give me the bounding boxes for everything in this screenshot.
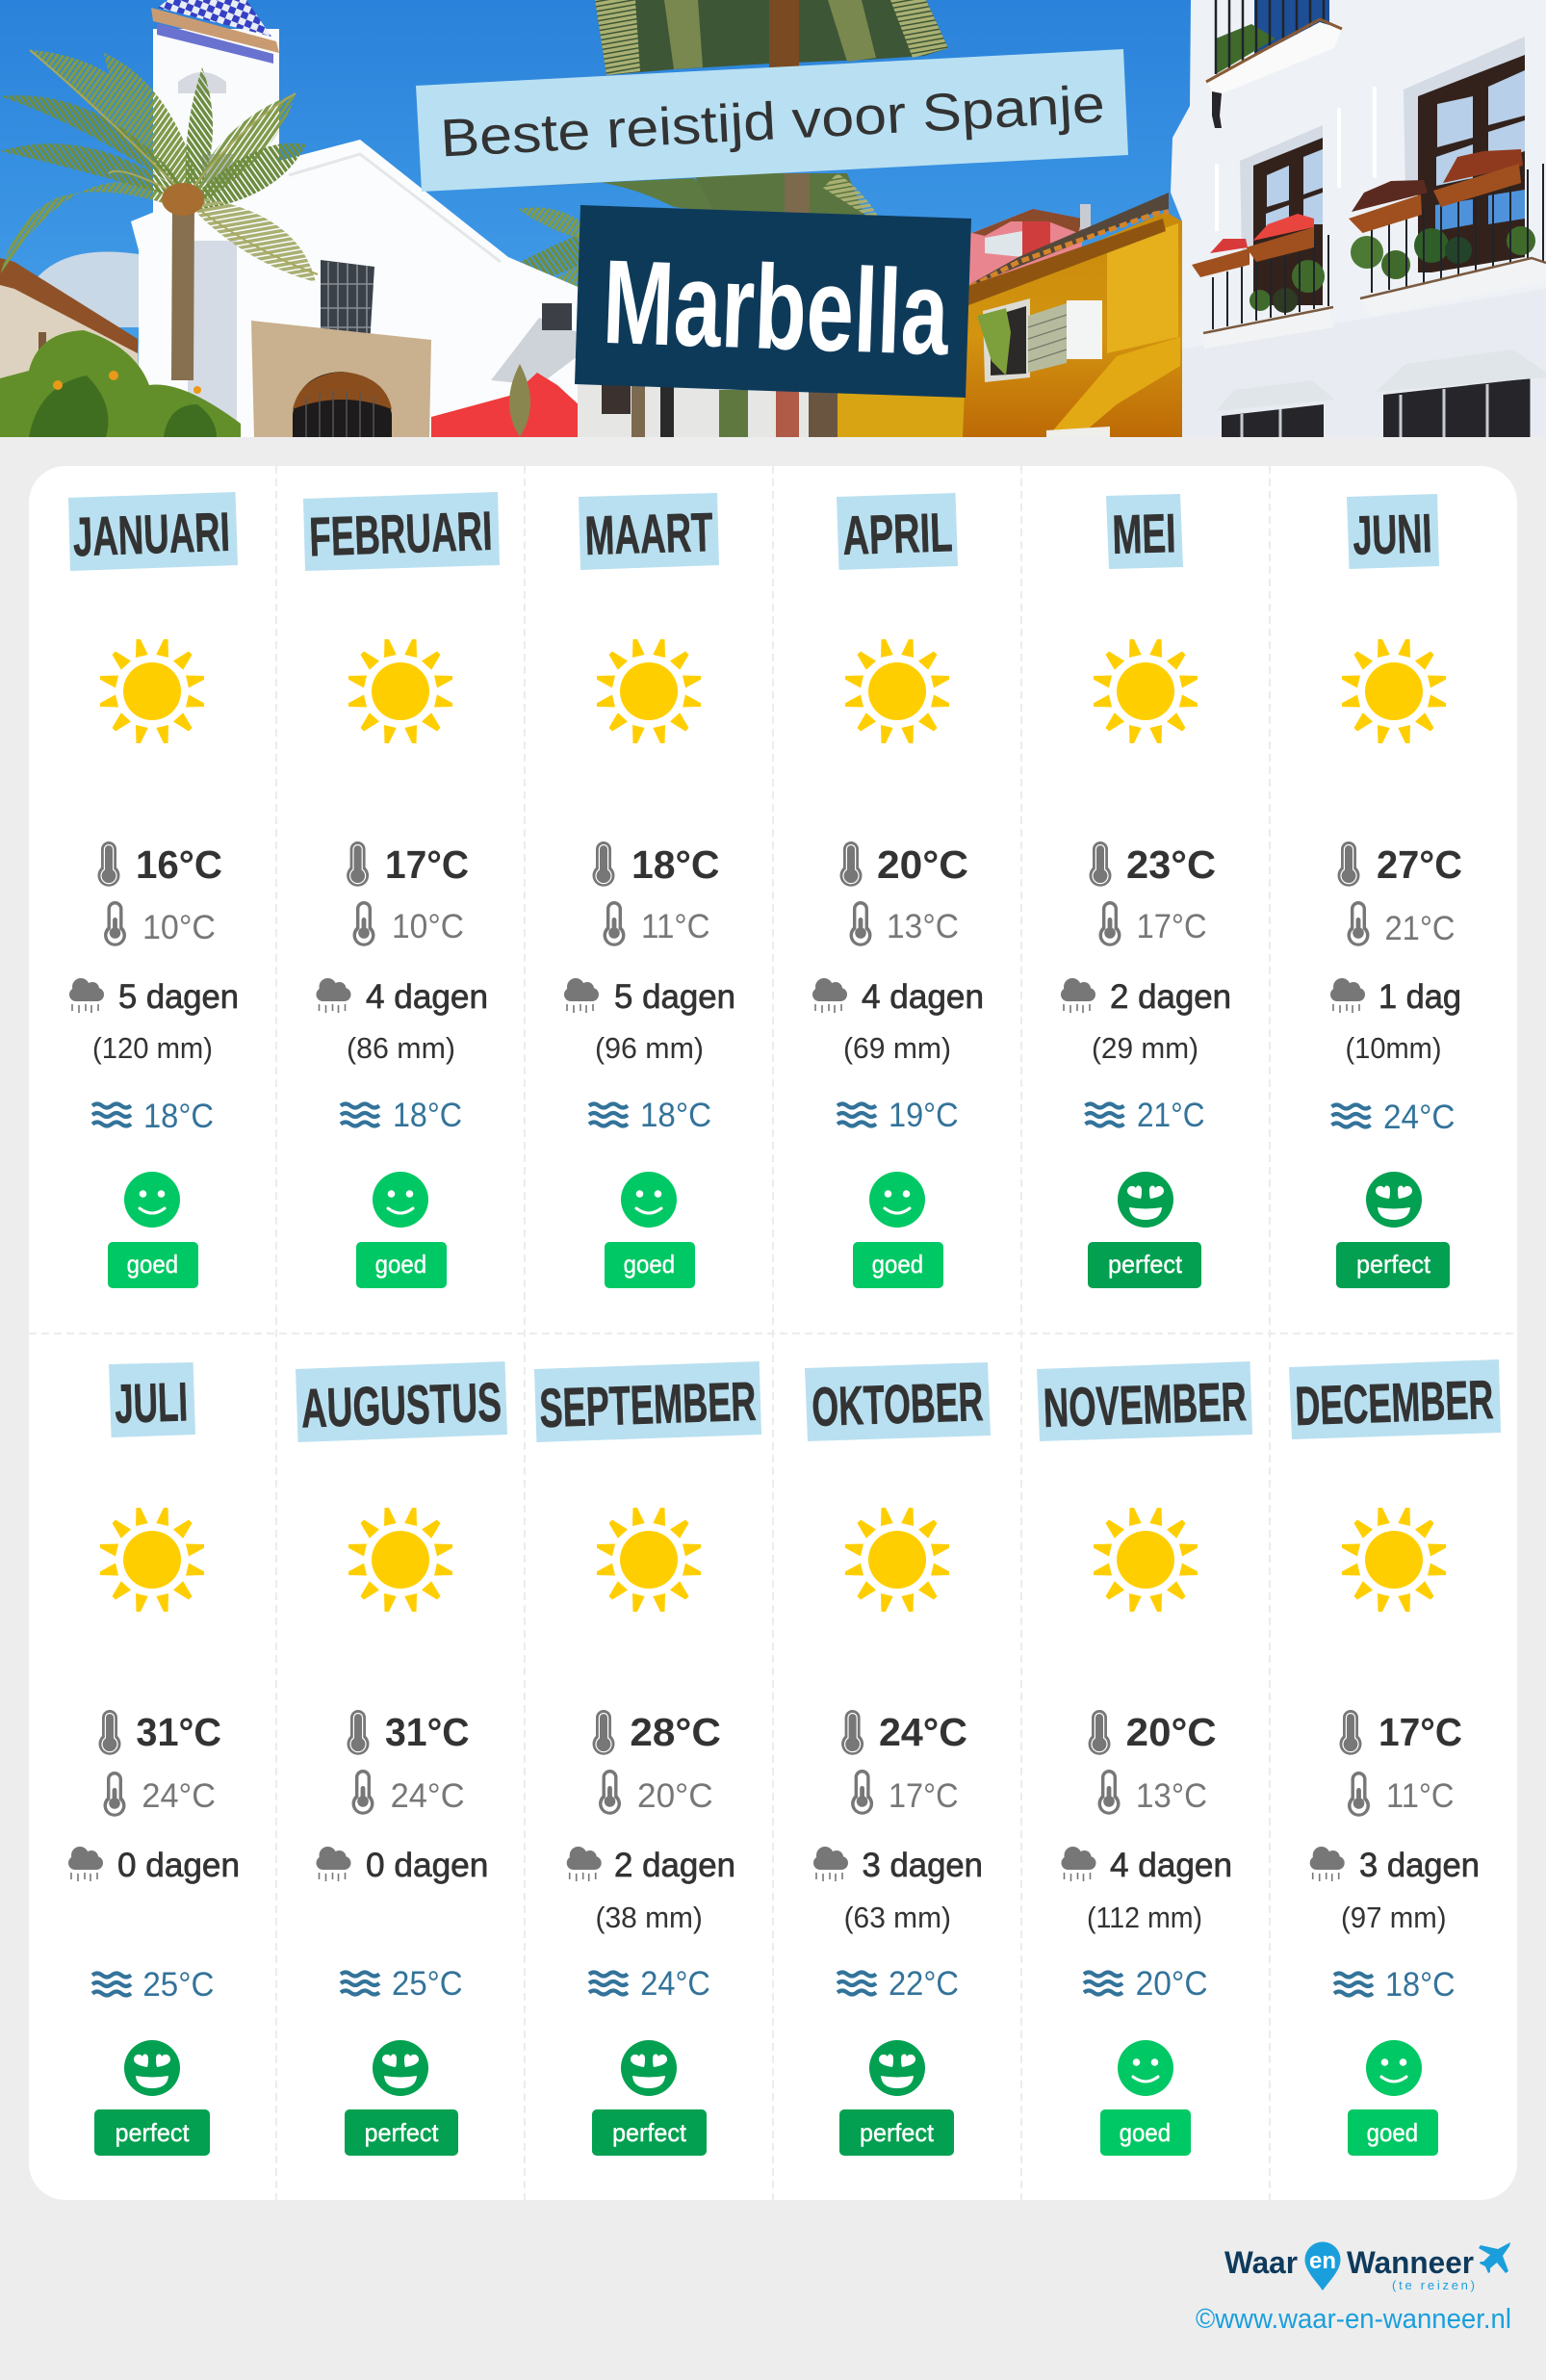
sea temperature: 24°C bbox=[640, 1965, 710, 2003]
icon: thermometer low bbox=[851, 1770, 873, 1815]
month: april bbox=[812, 493, 984, 1288]
sea temperature: 22°C bbox=[889, 1965, 959, 2003]
icon: thermometer high bbox=[1340, 1710, 1361, 1755]
rating badge: perfect bbox=[364, 2118, 439, 2147]
max temperature: 31°C bbox=[136, 1710, 221, 1754]
icon: smiley bbox=[1118, 1172, 1173, 1228]
icon: sun bbox=[1094, 639, 1198, 743]
max temperature: 28°C bbox=[630, 1710, 721, 1754]
rain days: 2 dagen bbox=[614, 1847, 735, 1884]
icon: rain cloud bbox=[564, 978, 599, 1013]
rating badge: goed bbox=[1367, 2118, 1418, 2147]
heading augustus: AUGUSTUS bbox=[300, 1372, 502, 1439]
min temperature: 17°C bbox=[889, 1777, 959, 1815]
rating badge: perfect bbox=[612, 2118, 687, 2147]
rainfall: (69 mm) bbox=[843, 1031, 951, 1065]
heading juni: JUNI bbox=[1352, 503, 1432, 567]
rating badge: goed bbox=[375, 1250, 426, 1279]
rating badge: goed bbox=[624, 1250, 675, 1279]
top balcony bbox=[1206, 0, 1342, 128]
month: februari bbox=[303, 492, 500, 1288]
rating badge bbox=[839, 2109, 954, 2156]
church nave bbox=[131, 140, 582, 437]
rain days: 5 dagen bbox=[118, 978, 239, 1016]
title ribbon: Beste reistijd voor Spanje bbox=[439, 73, 1106, 168]
rating badge: goed bbox=[127, 1250, 178, 1279]
icon: thermometer low bbox=[849, 901, 872, 946]
palm tree left bbox=[0, 50, 318, 380]
heading oktober bbox=[805, 1362, 991, 1441]
icon: sun bbox=[100, 639, 204, 743]
rain days: 0 dagen bbox=[117, 1847, 240, 1884]
sea temperature: 18°C bbox=[640, 1097, 711, 1134]
icon: sun bbox=[597, 1508, 701, 1612]
icon: thermometer high bbox=[839, 841, 863, 887]
max temperature: 23°C bbox=[1126, 842, 1216, 887]
church window bbox=[321, 260, 374, 345]
heading januari: JANUARI bbox=[72, 502, 231, 568]
min temperature: 11°C bbox=[641, 908, 710, 945]
heading juni bbox=[1347, 494, 1439, 569]
min temperature: 20°C bbox=[637, 1777, 713, 1815]
icon: sun bbox=[100, 1508, 204, 1612]
min temperature: 11°C bbox=[1386, 1777, 1454, 1815]
min temperature: 17°C bbox=[1137, 908, 1207, 945]
bell tower bbox=[151, 0, 279, 437]
rating badge: goed bbox=[1120, 2118, 1171, 2147]
icon: rain cloud bbox=[316, 1847, 350, 1881]
icon: map pin bbox=[1305, 2241, 1340, 2290]
icon: rain cloud bbox=[68, 1847, 103, 1881]
rainfall: (38 mm) bbox=[595, 1901, 703, 1934]
sea temperature: 21°C bbox=[1137, 1097, 1205, 1134]
icon: smiley bbox=[1366, 2040, 1422, 2096]
right balcony with plants bbox=[1351, 164, 1546, 316]
icon: sun bbox=[845, 1508, 949, 1612]
month: augustus bbox=[296, 1361, 507, 2156]
heading mei: MEI bbox=[1112, 503, 1176, 566]
rainfall: (112 mm) bbox=[1087, 1901, 1202, 1934]
max temperature: 27°C bbox=[1377, 842, 1462, 887]
max temperature: 16°C bbox=[136, 842, 222, 887]
city name sign: Marbella bbox=[601, 236, 951, 380]
rain days: 3 dagen bbox=[863, 1847, 983, 1884]
icon: smiley bbox=[1366, 1172, 1422, 1228]
max temperature: 20°C bbox=[877, 842, 968, 887]
rainfall: (120 mm) bbox=[92, 1031, 213, 1065]
icon: sun bbox=[348, 639, 452, 743]
heading mei bbox=[1106, 494, 1183, 569]
icon: smiley bbox=[621, 2040, 677, 2096]
icon: waves bbox=[589, 1103, 628, 1126]
min temperature: 10°C bbox=[142, 909, 216, 946]
title ribbon bbox=[416, 49, 1128, 192]
max temperature: 20°C bbox=[1126, 1710, 1217, 1754]
icon: thermometer high bbox=[841, 1710, 863, 1755]
icon: thermometer high bbox=[1090, 841, 1111, 887]
min temperature: 10°C bbox=[392, 908, 464, 945]
icon: thermometer high bbox=[1338, 841, 1359, 887]
icon: waves bbox=[92, 1974, 131, 1995]
max temperature: 18°C bbox=[631, 842, 720, 887]
icon: sun bbox=[348, 1508, 452, 1612]
rain days: 3 dagen bbox=[1359, 1847, 1480, 1884]
min temperature: 13°C bbox=[1136, 1777, 1207, 1815]
icon: smiley bbox=[373, 1172, 428, 1228]
icon: map pin: en bbox=[1309, 2248, 1336, 2274]
wall pipes bbox=[1217, 87, 1375, 231]
icon: thermometer low bbox=[104, 901, 126, 946]
left house and roof bbox=[0, 258, 141, 437]
icon: waves bbox=[1332, 1105, 1371, 1126]
min temperature: 13°C bbox=[887, 908, 959, 945]
icon: smiley bbox=[373, 2040, 428, 2096]
icon: rain cloud bbox=[813, 1847, 848, 1881]
rating badge: perfect bbox=[1356, 1250, 1431, 1279]
min temperature: 21°C bbox=[1384, 910, 1456, 947]
rating badge bbox=[1088, 1242, 1201, 1288]
icon: smiley bbox=[869, 1172, 925, 1228]
heading februari bbox=[303, 492, 500, 571]
heading oktober: OKTOBER bbox=[811, 1371, 984, 1438]
upper right window bbox=[1404, 37, 1525, 272]
rain days: 4 dagen bbox=[366, 978, 488, 1016]
min temperature: 24°C bbox=[391, 1777, 465, 1815]
icon: thermometer high bbox=[347, 841, 369, 887]
pink house bbox=[969, 204, 1091, 289]
icon: smiley bbox=[869, 2040, 925, 2096]
lower left window bbox=[1240, 125, 1323, 305]
rating badge bbox=[605, 1242, 695, 1288]
icon: rain cloud bbox=[1310, 1847, 1345, 1881]
icon: waves bbox=[837, 1972, 876, 1995]
ground floor windows and awnings bbox=[1216, 349, 1546, 437]
icon: rain cloud bbox=[1061, 978, 1095, 1013]
palm bud in front of tent bbox=[509, 364, 530, 437]
rating badge bbox=[853, 1242, 943, 1288]
city name sign bbox=[575, 205, 971, 398]
icon: sun bbox=[597, 639, 701, 743]
rating badge bbox=[108, 1242, 198, 1288]
icon: thermometer low bbox=[352, 1770, 374, 1815]
icon: airplane bbox=[1479, 2242, 1510, 2273]
icon: rain cloud bbox=[567, 1847, 602, 1881]
icon: waves bbox=[1334, 1974, 1373, 1995]
icon: thermometer low bbox=[1097, 1770, 1121, 1815]
icon: waves bbox=[837, 1103, 876, 1126]
heading september bbox=[534, 1361, 761, 1442]
rating badge bbox=[592, 2109, 707, 2156]
month: mei bbox=[1061, 494, 1231, 1288]
max temperature: 17°C bbox=[385, 842, 469, 887]
rating badge bbox=[1100, 2109, 1191, 2156]
rating badge bbox=[94, 2109, 210, 2156]
rating badge: perfect bbox=[1108, 1250, 1183, 1279]
icon: smiley bbox=[124, 1172, 180, 1228]
sea temperature: 18°C bbox=[1385, 1966, 1456, 2004]
icon: smiley bbox=[124, 2040, 180, 2096]
month: juni bbox=[1330, 494, 1462, 1288]
red market tent bbox=[431, 373, 636, 437]
rain days: 4 dagen bbox=[862, 978, 984, 1016]
logo: Waar en Wanneer: Wanneer bbox=[1347, 2245, 1474, 2280]
sea temperature: 19°C bbox=[889, 1097, 959, 1134]
icon: thermometer high bbox=[98, 841, 119, 887]
rainfall: (63 mm) bbox=[844, 1901, 951, 1934]
heading januari bbox=[68, 492, 238, 571]
heading september: SEPTEMBER bbox=[538, 1371, 757, 1439]
icon: thermometer high bbox=[1088, 1710, 1111, 1755]
month: oktober bbox=[805, 1362, 991, 2156]
icon: sun bbox=[1342, 1508, 1446, 1612]
website credit: ©www.waar-en-wanneer.nl bbox=[1196, 2304, 1511, 2335]
rainfall: (86 mm) bbox=[347, 1031, 455, 1065]
icon: rain cloud bbox=[69, 978, 104, 1013]
white house right bbox=[1171, 0, 1546, 437]
heading augustus bbox=[296, 1361, 507, 1442]
max temperature: 17°C bbox=[1379, 1710, 1462, 1754]
icon: thermometer high bbox=[347, 1710, 370, 1755]
heading februari: FEBRUARI bbox=[308, 501, 493, 568]
sea temperature: 25°C bbox=[392, 1965, 463, 2003]
month: juli bbox=[68, 1362, 240, 2156]
icon: rain cloud bbox=[1330, 978, 1365, 1013]
icon: thermometer low bbox=[599, 1770, 621, 1815]
logo: Waar en Wanneer bbox=[1224, 2241, 1510, 2292]
street center buildings bbox=[578, 380, 972, 437]
church door arch bbox=[251, 321, 431, 437]
icon: waves bbox=[341, 1972, 379, 1995]
sea temperature: 20°C bbox=[1136, 1965, 1208, 2003]
sea temperature: 25°C bbox=[142, 1966, 214, 2004]
month: november bbox=[1037, 1361, 1252, 2156]
rating badge: perfect bbox=[116, 2118, 190, 2147]
rainfall: (96 mm) bbox=[595, 1031, 704, 1065]
min temperature: 24°C bbox=[142, 1777, 216, 1815]
icon: waves bbox=[589, 1972, 628, 1995]
rain days: 1 dag bbox=[1379, 978, 1461, 1016]
rainfall: (29 mm) bbox=[1092, 1031, 1198, 1065]
max temperature: 24°C bbox=[879, 1710, 967, 1754]
icon: thermometer low bbox=[1099, 901, 1121, 946]
rainfall: (97 mm) bbox=[1341, 1901, 1446, 1934]
flower boxes bbox=[1192, 149, 1523, 277]
rain days: 4 dagen bbox=[1110, 1847, 1232, 1884]
logo: Waar en Wanneer: (te reizen) bbox=[1392, 2278, 1475, 2292]
icon: sun bbox=[1342, 639, 1446, 743]
rating badge bbox=[1348, 2109, 1438, 2156]
left balcony with plants bbox=[1203, 235, 1333, 349]
rainfall: (10mm) bbox=[1346, 1031, 1442, 1065]
white panel bbox=[29, 466, 1517, 2200]
rating badge bbox=[345, 2109, 458, 2156]
icon: rain cloud bbox=[812, 978, 847, 1013]
icon: thermometer low bbox=[352, 901, 375, 946]
month: december bbox=[1289, 1359, 1501, 2156]
heading november bbox=[1037, 1361, 1252, 1441]
icon: sun bbox=[845, 639, 949, 743]
middle palm behind signs bbox=[483, 173, 884, 315]
yellow house bbox=[963, 193, 1182, 437]
heading juli bbox=[109, 1362, 195, 1437]
month: januari bbox=[68, 492, 239, 1288]
heading april: APRIL bbox=[841, 502, 953, 567]
orange tree bbox=[0, 330, 241, 437]
rating badge: goed bbox=[872, 1250, 923, 1279]
icon: thermometer low bbox=[1348, 1772, 1370, 1817]
rating badge bbox=[1336, 1242, 1450, 1288]
icon: waves bbox=[92, 1103, 131, 1126]
rain days: 5 dagen bbox=[614, 978, 735, 1016]
icon: smiley bbox=[1118, 2040, 1173, 2096]
month: maart bbox=[564, 493, 735, 1288]
rating badge: perfect bbox=[860, 2118, 935, 2147]
icon: thermometer low bbox=[104, 1772, 125, 1817]
month: september bbox=[534, 1361, 761, 2156]
sea temperature: 18°C bbox=[393, 1097, 462, 1134]
sea temperature: 24°C bbox=[1383, 1099, 1456, 1136]
heading juli: JULI bbox=[114, 1371, 189, 1436]
icon: thermometer low bbox=[1348, 901, 1369, 946]
icon: rain cloud bbox=[316, 978, 350, 1013]
hero photo of Marbella street bbox=[0, 0, 1546, 437]
icon: waves bbox=[1084, 1972, 1122, 1995]
max temperature: 31°C bbox=[385, 1710, 470, 1754]
rating badge bbox=[356, 1242, 447, 1288]
rain days: 2 dagen bbox=[1110, 978, 1231, 1016]
heading april bbox=[837, 493, 958, 570]
icon: thermometer high bbox=[593, 1710, 614, 1755]
icon: rain cloud bbox=[1061, 1847, 1095, 1881]
heading maart: MAART bbox=[584, 502, 714, 567]
sea temperature: 18°C bbox=[143, 1098, 214, 1135]
rain days: 0 dagen bbox=[366, 1847, 488, 1884]
heading november: NOVEMBER bbox=[1043, 1371, 1248, 1439]
icon: thermometer high bbox=[593, 841, 614, 887]
center palm, upper bbox=[595, 0, 948, 75]
icon: waves bbox=[1086, 1103, 1124, 1126]
icon: thermometer high bbox=[98, 1710, 121, 1755]
icon: thermometer low bbox=[603, 901, 626, 946]
icon: smiley bbox=[621, 1172, 677, 1228]
heading maart bbox=[579, 493, 719, 570]
icon: waves bbox=[341, 1103, 379, 1126]
icon: sun bbox=[1094, 1508, 1198, 1612]
logo: Waar en Wanneer: Waar bbox=[1224, 2245, 1298, 2280]
